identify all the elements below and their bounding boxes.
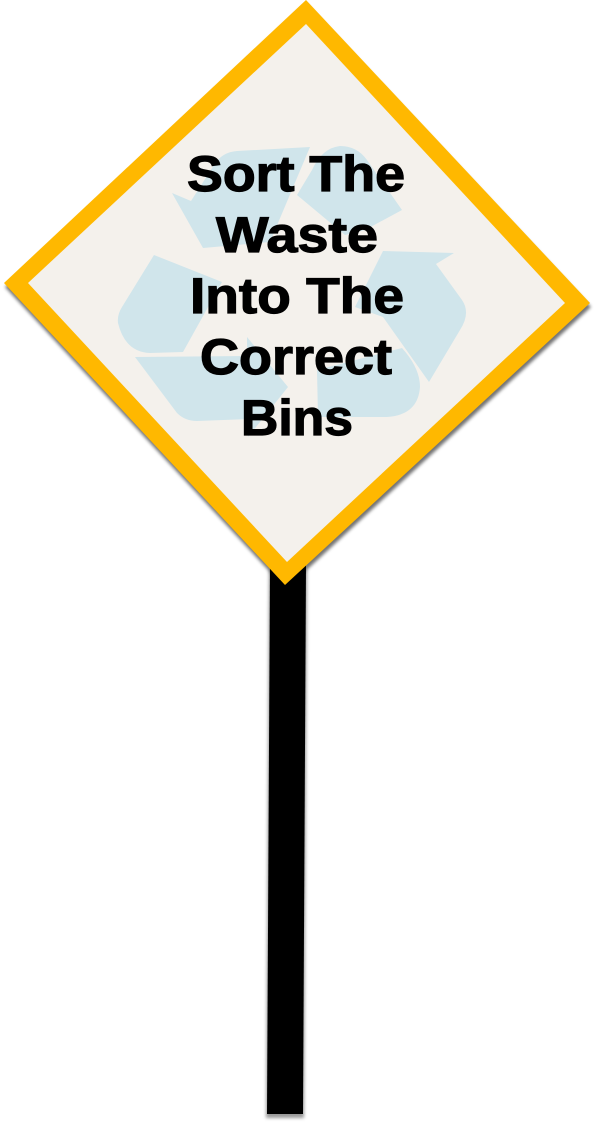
heading: sign text: Sort The — [187, 146, 405, 202]
heading: sign text — [187, 146, 405, 446]
heading: sign text: Bins — [241, 390, 353, 446]
heading: sign text: Into The — [190, 268, 404, 324]
heading: sign text: Correct — [200, 329, 392, 385]
sign post — [266, 565, 307, 1118]
heading: sign text: Waste — [216, 207, 378, 263]
icon: recycling symbol watermark — [118, 146, 466, 437]
diamond sign board — [4, 0, 591, 589]
